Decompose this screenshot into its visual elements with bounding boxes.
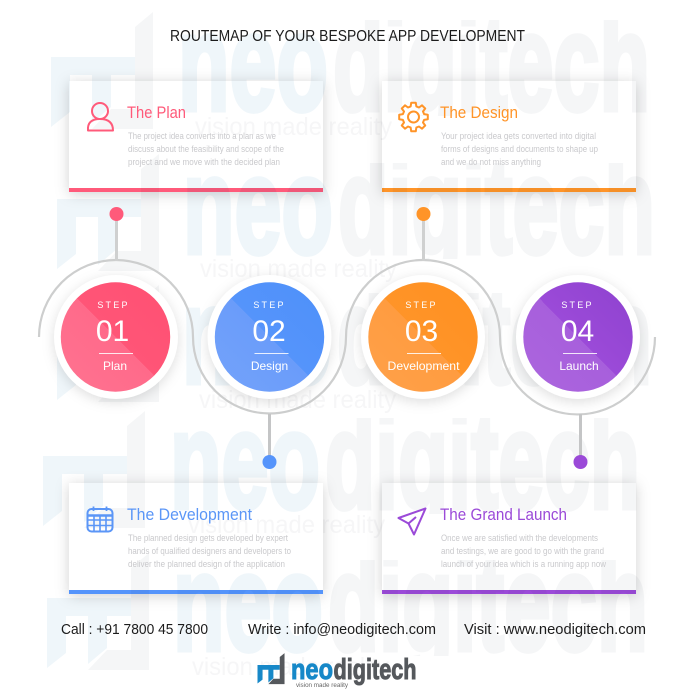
step 2 circle: Design [251, 359, 288, 373]
step 3 circle [361, 275, 485, 399]
text block: plan description: The project idea converts into a plan as we [128, 131, 276, 141]
watermark: repeated neodigitech logos: neo [170, 384, 320, 538]
logo wordmark: digitech [334, 654, 416, 686]
logo tagline: vision made reality [296, 682, 349, 689]
connector: plan stem and dot [110, 207, 124, 261]
panel: The Design card background [382, 81, 636, 192]
text block: development description: The planned design gets developed by expert [128, 533, 288, 543]
logo wordmark: neo [291, 654, 333, 686]
heading: The Development: The Development [127, 506, 252, 524]
text block: development description: hands of qualified designers and developers to [128, 546, 291, 556]
text block: launch description: launch of your idea which is a running app now [441, 559, 606, 569]
step 4 circle: STEP [561, 300, 594, 310]
step 4 circle: Launch [559, 359, 599, 373]
text block: launch description: Once we are satisfied with the developments [441, 533, 598, 543]
step 1 circle [54, 275, 178, 399]
panel: The Plan card background [69, 81, 323, 192]
step 1 circle: Plan [103, 359, 127, 373]
logo wordmark [291, 654, 416, 686]
card content: The Grand Launch [398, 506, 606, 569]
watermark: repeated neodigitech logos: neo [173, 526, 323, 680]
step 3 circle: 03 [405, 315, 438, 348]
text block: launch description [441, 533, 606, 569]
step 2 circle [208, 275, 332, 399]
watermark: repeated neodigitech logos: vision made reality [195, 113, 392, 141]
text block: plan description: project and we move with the decided plan [128, 157, 280, 167]
text block: design description: and we do not miss anything [441, 157, 541, 167]
contact: phone: Call : +91 7800 45 7800 [61, 622, 208, 638]
step 3 circle: STEP [405, 300, 438, 310]
connector: launch stem and dot [574, 414, 588, 469]
text block: design description: forms of designs and documents to shape up [441, 144, 598, 154]
text block: plan description: discuss about the feasibility and scope of the [128, 144, 284, 154]
text block: development description: deliver the planned design of the application [128, 559, 285, 569]
card content: The Design [399, 103, 598, 167]
step 2 circle: 02 [252, 315, 286, 348]
contact: website: Visit : www.neodigitech.com [464, 622, 646, 638]
step 3 circle: Development [388, 359, 460, 373]
watermark: repeated neodigitech logos: vision made reality [188, 511, 385, 539]
connector: design stem and dot [416, 207, 430, 261]
icon: person [88, 103, 113, 130]
panel: The Development card background [69, 483, 323, 594]
watermark: repeated neodigitech logos: vision made reality [200, 255, 397, 283]
logo: neodigitech [258, 653, 416, 689]
title: ROUTEMAP OF YOUR BESPOKE APP DEVELOPMENT [170, 28, 525, 45]
card content: The Plan [88, 103, 284, 167]
step 2 circle: STEP [253, 300, 286, 310]
watermark: repeated neodigitech logos: neo [183, 129, 333, 283]
connector: winding road line [39, 260, 655, 414]
icon: logo mark [258, 653, 285, 684]
heading: The Grand Launch: The Grand Launch [440, 506, 567, 524]
panel: The Grand Launch card background [382, 483, 636, 594]
text block: design description: Your project idea gets converted into digital [441, 131, 596, 141]
watermark: repeated neodigitech logos: vision made reality [192, 653, 389, 681]
card content: The Development [88, 506, 291, 569]
text block: launch description: and testings, we are good to go with the grand [441, 546, 604, 556]
text block: plan description [128, 131, 284, 167]
connector: development stem and dot [262, 414, 276, 469]
icon: paper plane [398, 508, 426, 534]
heading: The Design: The Design [440, 104, 518, 122]
contact: email: Write : info@neodigitech.com [248, 622, 436, 638]
heading: The Plan: The Plan [127, 104, 186, 122]
step 1 circle: STEP [97, 300, 130, 310]
step 4 circle [516, 275, 640, 399]
watermark: repeated neodigitech logos: vision made reality [199, 386, 396, 414]
text block: development description [128, 533, 291, 569]
text block: design description [441, 131, 598, 167]
step 1 circle: 01 [96, 315, 129, 348]
watermark: repeated neodigitech logos: neo [182, 259, 332, 413]
icon: gear [399, 103, 428, 131]
step 4 circle: 04 [561, 315, 594, 348]
icon: calendar [88, 506, 112, 532]
